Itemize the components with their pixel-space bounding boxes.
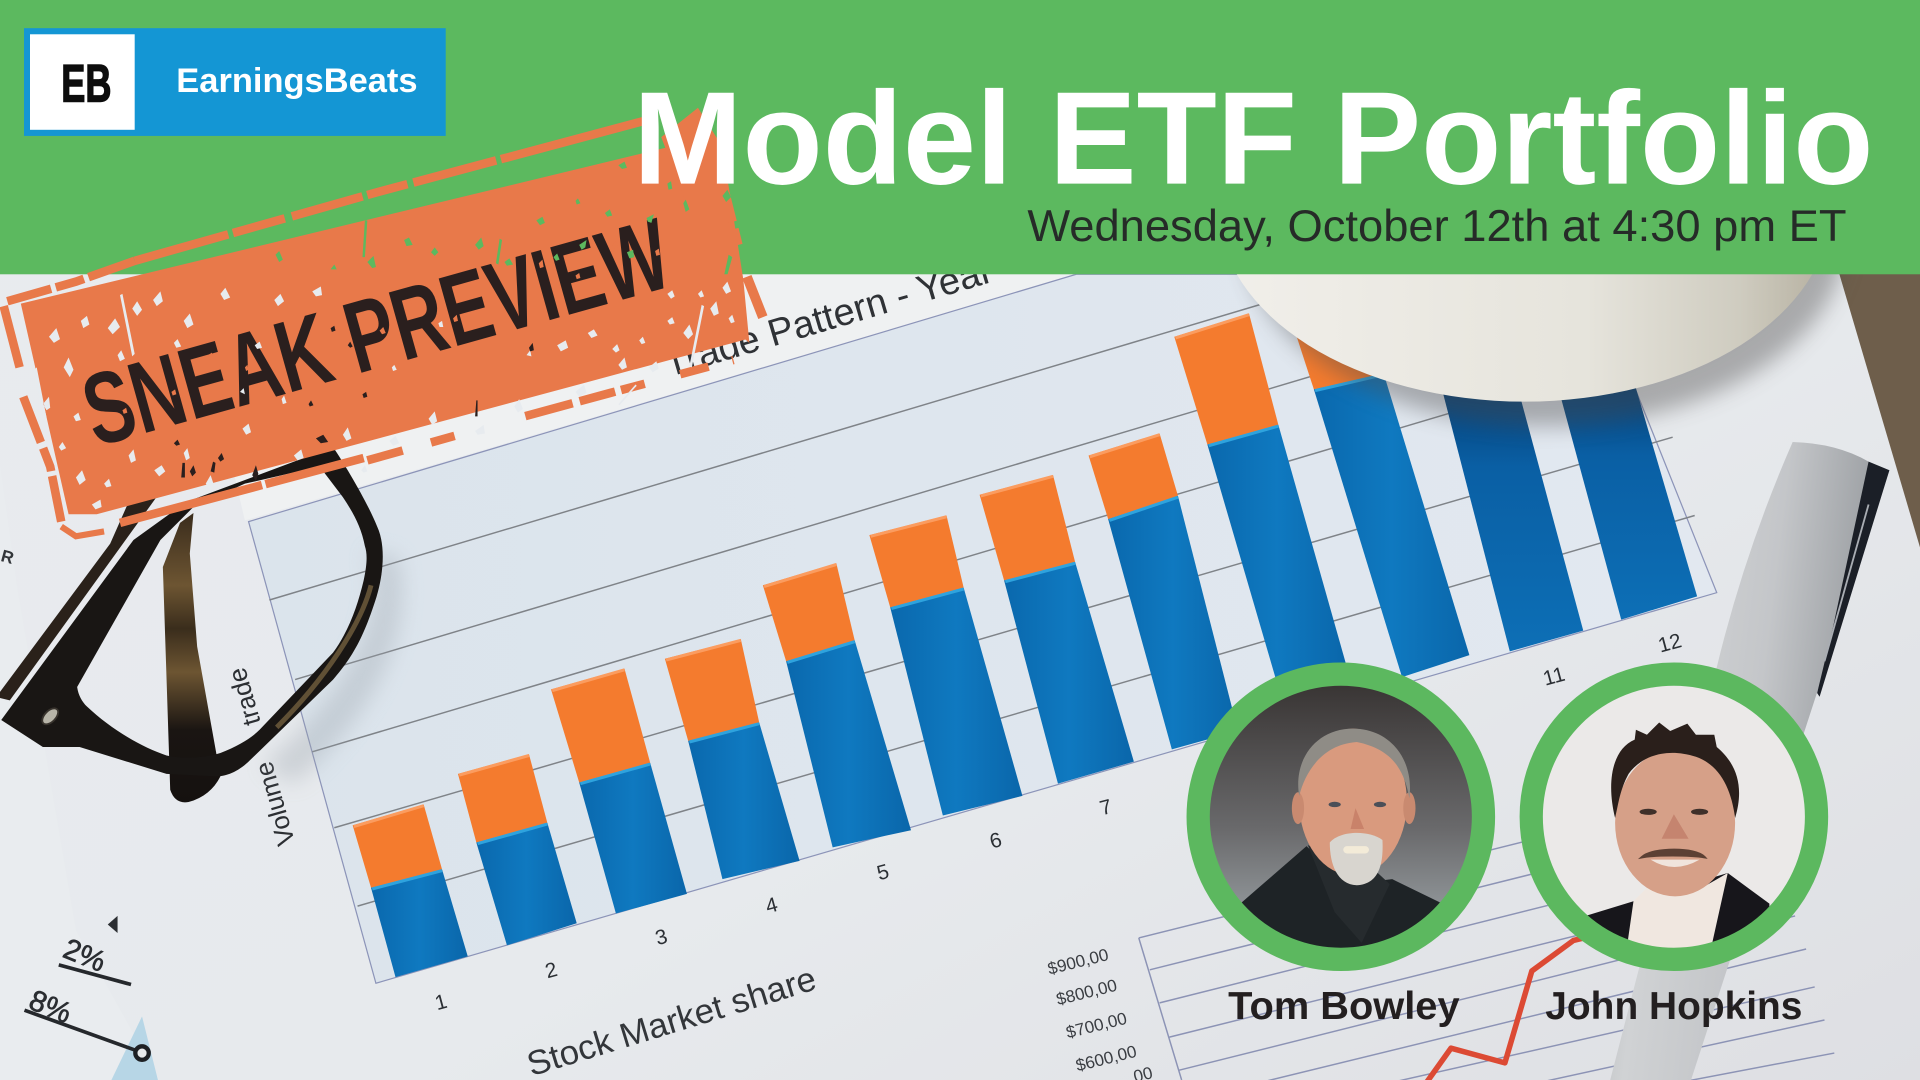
bar 2 <box>458 754 577 945</box>
shirt <box>1628 873 1728 948</box>
bar 3 <box>551 669 687 913</box>
logo: EarningsBeats: EB <box>61 55 111 114</box>
price axis labels: $700,00 <box>1064 1008 1129 1042</box>
portrait ring <box>1198 674 1483 959</box>
nose <box>1351 808 1364 829</box>
portrait ring <box>1531 674 1817 959</box>
price axis labels <box>1046 944 1155 1080</box>
x axis labels: 4 <box>763 893 780 918</box>
hinge rivet <box>39 706 61 727</box>
temple arm <box>163 513 220 802</box>
name: Tom Bowley: Tom Bowley <box>1228 985 1460 1028</box>
icon: glasses <box>0 447 402 802</box>
x axis labels: 7 <box>1097 795 1115 820</box>
x axis labels: 1 <box>432 990 450 1015</box>
portrait: John Hopkins <box>1531 674 1817 967</box>
bar 9 <box>1174 313 1347 692</box>
front frame <box>1 447 383 776</box>
moustache <box>1642 850 1704 857</box>
hair <box>1298 729 1410 798</box>
nose <box>1662 814 1689 839</box>
bar 4 <box>665 639 800 879</box>
stamp wear specks over banner <box>276 162 732 284</box>
head <box>1615 749 1735 896</box>
beard <box>1330 833 1383 885</box>
x axis labels: 6 <box>987 828 1004 853</box>
eyes <box>1640 809 1657 815</box>
stamp body <box>21 140 747 514</box>
head <box>1299 729 1407 876</box>
stamp text wear <box>122 241 660 414</box>
tortoise edge <box>277 585 371 727</box>
bar 10 <box>1296 318 1469 677</box>
bar 7 <box>980 475 1134 784</box>
shirt <box>1242 846 1440 948</box>
x axis labels: 11 <box>1541 663 1567 691</box>
x axis labels: 12 <box>1656 629 1684 657</box>
logo: EarningsBeats: EarningsBeats <box>176 62 418 100</box>
stamp text: SNEAK PREVIEW <box>71 196 682 468</box>
name: John Hopkins: John Hopkins <box>1545 985 1802 1028</box>
subtitle: date and time: Wednesday, October 12th at 4:30 pm ET <box>1027 202 1847 251</box>
price axis labels: $800,00 <box>1054 975 1119 1009</box>
bar 6 <box>869 516 1022 816</box>
bar 1 <box>353 804 468 977</box>
pen clip <box>1817 462 1889 697</box>
upper arm <box>0 485 165 700</box>
y axis title <box>224 664 301 849</box>
bar 8 <box>1089 433 1238 749</box>
bar 12 <box>1553 367 1697 620</box>
price axis labels: $600,00 <box>1074 1041 1139 1075</box>
mouth <box>1651 860 1700 867</box>
bar highlights <box>354 315 1384 889</box>
secondary chart: price line <box>1046 785 1834 1080</box>
title: Model ETF Portfolio <box>633 65 1873 213</box>
x axis labels: 5 <box>875 860 892 885</box>
x axis labels: 3 <box>653 925 670 950</box>
bottom-left pie chart fragment <box>0 545 158 1080</box>
chart title: Trade Pattern - Year <box>659 249 998 386</box>
stamp outer border <box>4 121 763 536</box>
bar chart: trade pattern <box>224 191 1717 1080</box>
bottom-left pie chart fragment: 2% <box>59 932 110 979</box>
bottom-left pie chart fragment: 8% <box>24 984 76 1030</box>
jacket <box>1588 873 1770 942</box>
price axis labels: $900,00 <box>1046 944 1110 979</box>
icon: white plate <box>1218 15 1847 426</box>
chart plot area <box>249 274 1717 983</box>
y axis title: Volume <box>250 758 301 849</box>
green header banner <box>0 0 1920 274</box>
y axis title: trade <box>224 664 267 729</box>
red price line <box>1427 933 1604 1080</box>
hair <box>1611 722 1739 818</box>
logo: EarningsBeats <box>24 28 446 136</box>
stamp torn extensions <box>661 108 749 343</box>
eyes <box>1329 802 1341 807</box>
bar 11 <box>1436 367 1583 651</box>
x axis labels: 2 <box>543 958 560 983</box>
stamp dark ink specks <box>174 326 534 481</box>
bar 5 <box>763 563 911 847</box>
portrait: Tom Bowley <box>1198 674 1483 967</box>
icon: silver pen <box>1610 442 1889 1080</box>
stamp: sneak preview <box>4 108 763 536</box>
x axis labels <box>432 629 1684 1015</box>
wooden desk corner <box>1838 269 1920 547</box>
